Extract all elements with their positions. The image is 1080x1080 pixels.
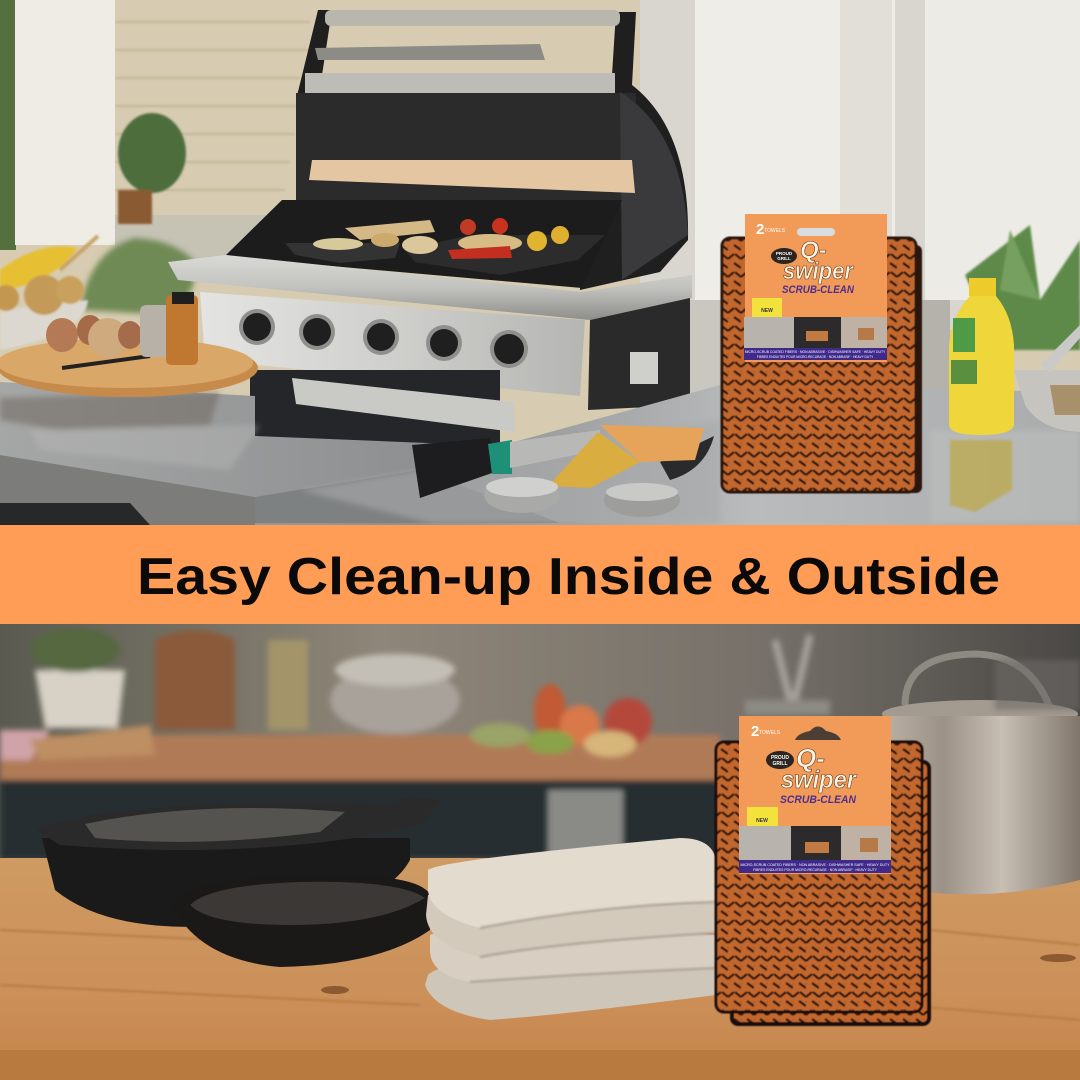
potted plant <box>118 113 186 224</box>
pack card: GRILL <box>777 256 791 261</box>
pack card <box>744 214 887 362</box>
oil bottle <box>949 278 1014 512</box>
grill cooking surface with food <box>226 200 622 288</box>
pack card: MICRO-SCRUB COATED FIBERS · NON ABRASIVE · DISHWASHER SAFE · HEAVY DUTY <box>745 350 886 354</box>
banner <box>0 525 1080 624</box>
scene: indoor kitchen table <box>0 624 1080 1080</box>
black grill pan <box>36 796 440 927</box>
steel pot <box>882 654 1080 894</box>
product pack: indoor <box>716 716 929 1024</box>
product pack: outdoor <box>722 214 922 493</box>
pack mat <box>722 238 922 493</box>
grill control panel with knobs <box>168 255 692 450</box>
pack card: swiper <box>781 766 857 794</box>
wooden table <box>0 858 1080 1080</box>
pack card: SCRUB-CLEAN <box>782 284 855 296</box>
wooden cutting board with potatoes <box>0 292 258 397</box>
pillar <box>15 0 115 245</box>
stack of folded towels <box>425 838 716 1020</box>
pack card: PROUD <box>776 251 793 256</box>
pack card: NEW <box>761 308 773 314</box>
pack card: SCRUB-CLEAN <box>780 794 857 806</box>
grass plant behind board <box>80 238 196 315</box>
agave plant <box>965 225 1080 350</box>
pack mat <box>716 742 929 1024</box>
patio background <box>0 0 1080 525</box>
banner heading: Easy Clean-up Inside & Outside <box>137 548 1000 606</box>
pack card: NEW <box>756 818 768 824</box>
pack card: TOWELS <box>764 228 786 234</box>
pack card: Q- <box>800 237 827 264</box>
scene: outdoor grill on patio counter <box>0 0 1080 525</box>
pack card: FIBRES ENDUITES POUR MICRO-RECURAGE · NON ABRASIF · HEAVY DUTY <box>757 355 874 359</box>
pack card: swiper <box>783 258 855 285</box>
pack card: TOWELS <box>759 730 781 736</box>
fruit bowl <box>0 236 98 350</box>
grill brush and scraper <box>412 425 714 517</box>
pack card: 2 <box>756 221 764 238</box>
pack card: MICRO-SCRUB COATED FIBERS · NON ABRASIVE · DISHWASHER SAFE · HEAVY DUTY <box>740 863 890 867</box>
pack card: PROUD <box>771 755 789 761</box>
glass bowl <box>1014 325 1080 432</box>
blurred kitchen background <box>0 624 1080 864</box>
pack card: GRILL <box>772 761 788 767</box>
pack card: 2 <box>751 723 759 740</box>
pack card: FIBRES ENDUITES POUR MICRO-RECURAGE · NON ABRASIF · HEAVY DUTY <box>753 868 878 872</box>
stone counter <box>0 382 1080 525</box>
pack card <box>739 716 891 874</box>
pack card: Q- <box>796 743 825 773</box>
black shallow pan <box>172 875 430 967</box>
grill hood <box>296 10 688 290</box>
